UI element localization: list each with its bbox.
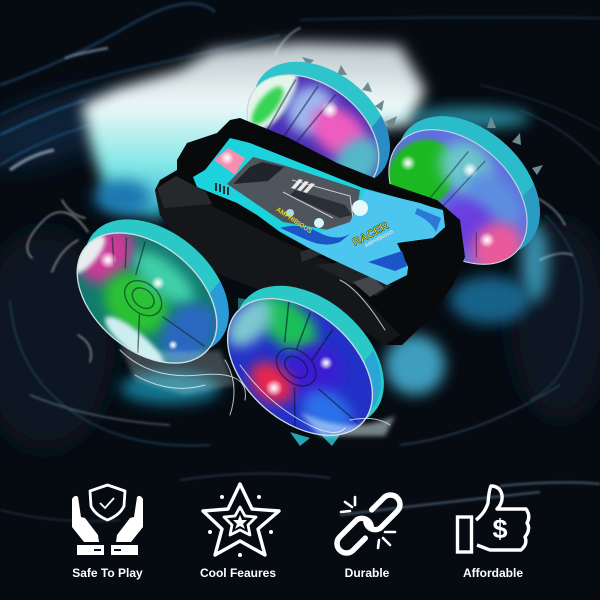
cyan top shell: RACER bbox=[351, 220, 391, 249]
label: Cool Feaures: Cool Feaures bbox=[200, 566, 276, 580]
light glints and water splashes bbox=[99, 101, 495, 436]
logo text: AMPHIBIOUS bbox=[275, 206, 314, 236]
wheel spikes bbox=[175, 57, 543, 446]
icon: thumbs up with dollar: $ bbox=[492, 514, 508, 544]
label: Affordable: Affordable bbox=[463, 566, 523, 580]
side vents bbox=[215, 183, 229, 195]
label: Durable: Durable bbox=[345, 566, 390, 580]
wave pattern bbox=[278, 190, 445, 285]
pink light bbox=[214, 148, 245, 175]
front wheel bbox=[226, 286, 384, 436]
cyan top shell bbox=[193, 138, 445, 285]
front left wheel bbox=[76, 219, 229, 364]
chevron vent bbox=[291, 179, 315, 193]
icon: chain link bbox=[333, 491, 404, 557]
rear wheel bbox=[246, 62, 390, 178]
label: Safe To Play: Safe To Play bbox=[72, 566, 143, 580]
icon: hands holding shield bbox=[72, 485, 143, 555]
icon: thumbs up with dollar bbox=[458, 486, 529, 552]
car body bbox=[155, 118, 465, 345]
cyan top shell: AMPHIBIOUS bbox=[364, 229, 396, 249]
right wheel bbox=[388, 116, 540, 265]
icon: star bbox=[203, 484, 279, 557]
water splash foam behind the car bbox=[27, 28, 572, 404]
